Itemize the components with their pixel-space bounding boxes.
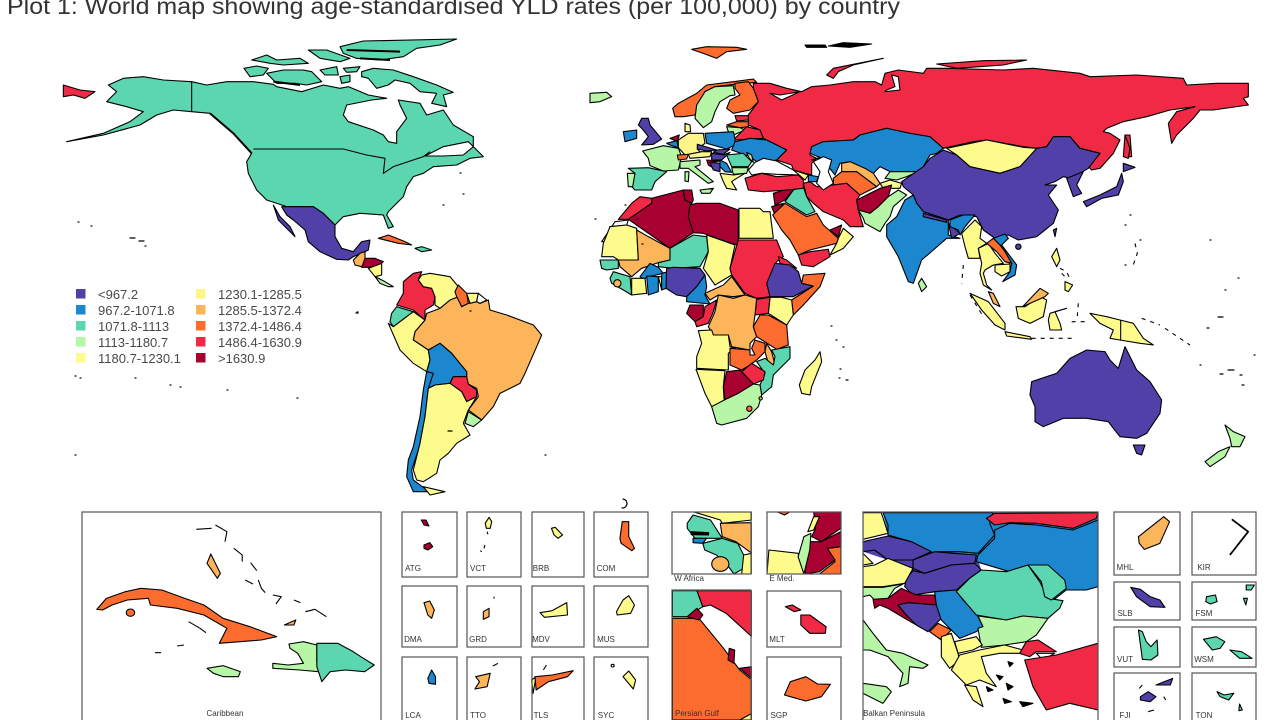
country: Chukotka tip of Russia xyxy=(63,85,95,98)
countries: Korea, Japan, Sakhalin, Taiwan xyxy=(1053,135,1135,237)
countries: Baltics and Eastern Europe xyxy=(705,116,787,162)
Central America and Caribbean xyxy=(353,235,432,287)
inset panels: Pacific island countries: TON xyxy=(1196,711,1213,720)
inset panels: Pacific island countries: FSM xyxy=(1196,609,1213,618)
countries: Central Asia, Iran, Arabia xyxy=(772,128,943,267)
inset panels: Caribbean and small island countries: COM xyxy=(597,564,616,573)
countries: Sahel and West Africa xyxy=(600,225,735,304)
inset panels: W Africa, E Med, Persian Gulf, Malta, Singapore: SGP xyxy=(771,711,787,720)
inset panels: Caribbean and small island countries: Caribbean xyxy=(207,709,243,718)
inset panels: W Africa, E Med, Persian Gulf, Malta, Singapore xyxy=(672,512,841,720)
legend: >1630.9 xyxy=(218,351,265,366)
inset panels: Caribbean and small island countries: SYC xyxy=(598,711,614,720)
inset panels: Caribbean and small island countries: GRD xyxy=(469,635,487,644)
legend: 1113-1180.7 xyxy=(98,335,168,350)
legend: 1486.4-1630.9 xyxy=(218,335,302,350)
inset panels: Caribbean and small island countries: LCA xyxy=(405,711,421,720)
inset panels: Pacific island countries: MHL xyxy=(1117,563,1134,572)
inset panels: Caribbean and small island countries: DMA xyxy=(404,635,423,644)
panel: Americas map xyxy=(63,39,542,495)
inset panels: W Africa, E Med, Persian Gulf, Malta, Singapore: W Africa xyxy=(674,574,704,583)
country: Canada and USA xyxy=(67,39,483,228)
inset panel: Balkan Peninsula: Balkan Peninsula xyxy=(863,709,925,718)
legend: 1285.5-1372.4 xyxy=(218,303,302,318)
legend: <967.2 xyxy=(98,287,138,302)
South America countries xyxy=(388,272,542,495)
panel: Russia, Central Asia, Middle East xyxy=(590,43,1248,267)
inset panels: W Africa, E Med, Persian Gulf, Malta, Singapore: Persian Gulf xyxy=(675,709,720,718)
panel: Southeast Asia xyxy=(950,215,1190,345)
countries: Nordic xyxy=(673,79,758,128)
countries: North Africa xyxy=(602,190,773,248)
legend: 1180.7-1230.1 xyxy=(98,351,181,366)
inset panels: Pacific island countries: WSM xyxy=(1194,655,1214,664)
countries: East and Central Africa xyxy=(687,240,825,350)
inset panels: Pacific island countries: SLB xyxy=(1117,609,1133,618)
Svalbard and Arctic islands xyxy=(692,43,872,58)
inset panels: W Africa, E Med, Persian Gulf, Malta, Singapore: MLT xyxy=(769,635,785,644)
country: Australia xyxy=(1030,347,1162,455)
panel: East Asia and Oceania xyxy=(887,135,1245,467)
countries: British Isles and Western Europe xyxy=(623,118,705,190)
inset panels: Caribbean and small island countries: MUS xyxy=(597,635,615,644)
inset panels: Caribbean and small island countries: VCT xyxy=(470,564,486,573)
legend: 967.2-1071.8 xyxy=(98,303,175,318)
legend: 1372.4-1486.4 xyxy=(218,319,302,334)
inset panels: Pacific island countries: VUT xyxy=(1117,655,1133,664)
legend: 1230.1-1285.5 xyxy=(218,287,302,302)
inset panels: Pacific island countries: KIR xyxy=(1197,563,1211,572)
panel: Europe xyxy=(623,79,833,193)
inset panels: Caribbean and small island countries: BRB xyxy=(533,564,549,573)
country: China xyxy=(902,137,1100,240)
inset panels: Pacific island countries: FJI xyxy=(1119,711,1131,720)
country: Turkey, Caucasus and inland seas xyxy=(745,157,833,192)
countries: Central and Southern Europe xyxy=(677,144,753,193)
inset panel: Balkan Peninsula xyxy=(863,512,1098,720)
inset panels: Caribbean and small island countries xyxy=(82,512,648,720)
country: Mexico xyxy=(273,205,370,260)
countries: South Asia xyxy=(887,195,960,292)
legend: 1071.8-1113 xyxy=(98,319,169,334)
legend xyxy=(76,287,302,366)
inset panels: Pacific island countries xyxy=(1114,512,1256,720)
country: New Zealand xyxy=(1205,425,1245,467)
inset panels: Caribbean and small island countries: TTO xyxy=(470,711,486,720)
inset panels: Caribbean and small island countries: MDV xyxy=(532,635,551,644)
country: Mongolia xyxy=(947,140,1051,173)
country: Iceland xyxy=(590,92,612,103)
inset panels: W Africa, E Med, Persian Gulf, Malta, Singapore: E Med. xyxy=(769,574,795,583)
inset panels: Caribbean and small island countries: TLS xyxy=(534,711,548,720)
scattered small islands xyxy=(75,173,1255,508)
panel: Africa xyxy=(600,190,825,425)
country: Russia xyxy=(748,58,1248,175)
countries: Southern Africa xyxy=(696,330,822,425)
inset panels: Caribbean and small island countries: ATG xyxy=(405,564,421,573)
